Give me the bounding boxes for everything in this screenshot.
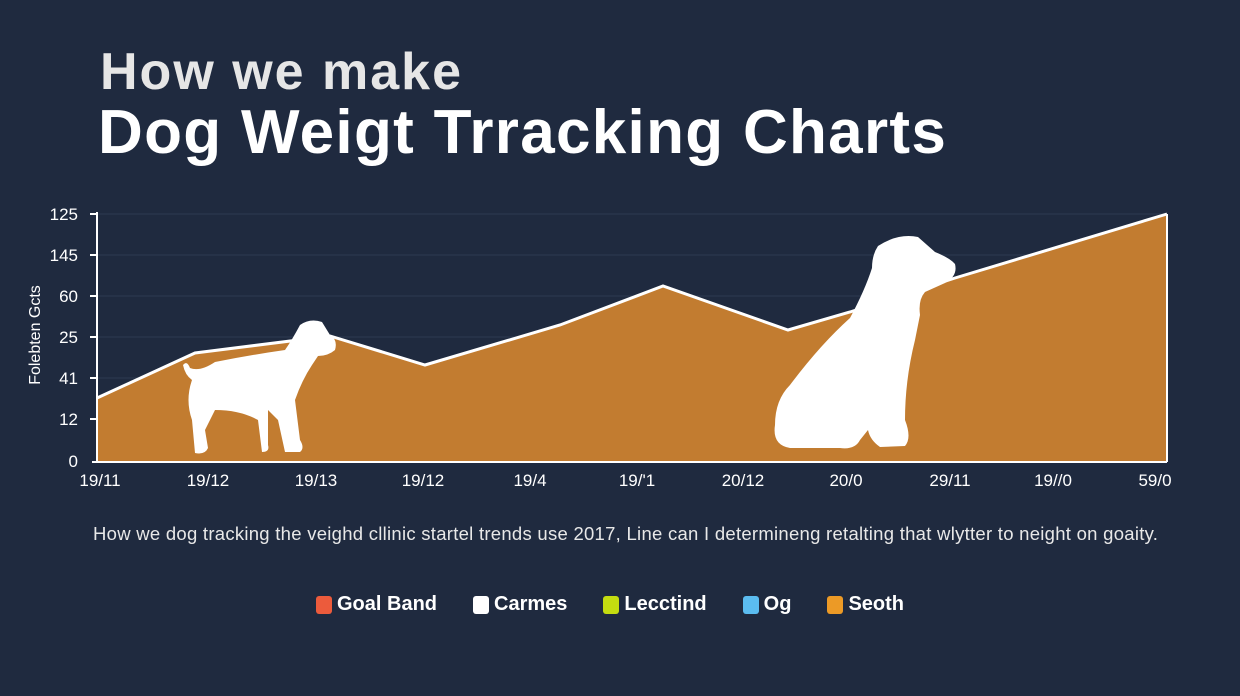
y labels: 25 [59, 328, 78, 347]
y labels: 60 [59, 287, 78, 306]
axes [90, 212, 1167, 463]
line [97, 214, 1167, 398]
x labels: 59/0 [1138, 471, 1172, 490]
legend: Carmes [494, 593, 567, 615]
x labels: 19/12 [187, 471, 229, 490]
icon: sitting dog [775, 236, 956, 448]
y labels: 125 [50, 205, 78, 224]
y labels: 12 [59, 410, 78, 429]
y axis title: Folebten Gcts [27, 285, 44, 385]
area fill [97, 214, 1167, 461]
legend: Lecctind [624, 593, 707, 615]
x labels: 19/'1 [619, 471, 655, 490]
legend: Seoth [848, 593, 904, 615]
icon: standing dog [183, 321, 336, 453]
x labels: 19//0 [1034, 471, 1072, 490]
legend: Goal Band [337, 593, 437, 615]
description text: How we dog tracking the veighd cllinic startel trends use 2017, Line can I determineng retalting that wlytter to neight on goaity. [93, 523, 1158, 544]
y labels: 0 [69, 452, 78, 471]
x labels: 19/11 [79, 471, 121, 490]
title line 2: Dog Weigt Trracking Charts [98, 98, 947, 167]
x labels: 20/12 [722, 471, 764, 490]
x labels: 19/13 [295, 471, 337, 490]
x labels: 19/12 [402, 471, 444, 490]
x labels: 20/0 [829, 471, 863, 490]
legend [316, 593, 904, 615]
title line 1: How we make [100, 43, 463, 101]
y labels: 145 [50, 246, 78, 265]
x labels [79, 471, 1172, 490]
y labels [50, 205, 78, 471]
y labels: 41 [59, 369, 78, 388]
chart [27, 205, 1172, 490]
x labels: 29/11 [929, 471, 971, 490]
x labels: 19/4 [513, 471, 547, 490]
legend: Og [764, 593, 791, 615]
